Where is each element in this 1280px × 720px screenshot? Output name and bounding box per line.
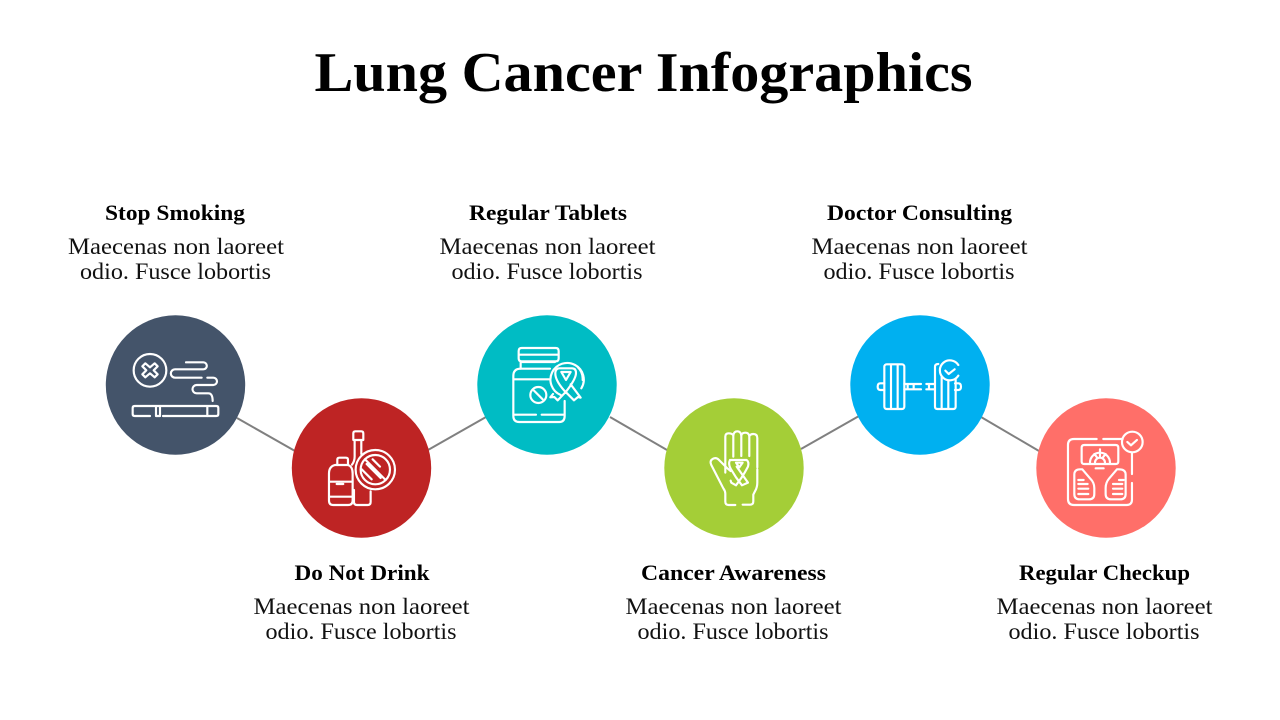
heading: doctor consulting: Doctor Consulting — [827, 200, 1012, 225]
text: cancer awareness description: odio. Fusce lobortis — [638, 619, 829, 644]
circle: doctor consulting — [850, 315, 990, 455]
text: do not drink description: Maecenas non laoreet — [254, 594, 470, 619]
text: stop smoking description: Maecenas non laoreet — [68, 234, 285, 259]
text: regular checkup description — [996, 594, 1213, 644]
step: doctor consulting — [812, 200, 1028, 455]
text: regular tablets description: Maecenas non laoreet — [440, 234, 656, 259]
text: do not drink description — [254, 594, 470, 644]
icon: dumbbell with check — [878, 360, 961, 409]
text: doctor consulting description: odio. Fusce lobortis — [824, 259, 1015, 284]
heading: do not drink: Do Not Drink — [294, 560, 430, 585]
circle: do not drink — [292, 398, 431, 538]
text: cancer awareness description — [626, 594, 842, 644]
step: regular tablets — [440, 200, 656, 455]
text: regular tablets description — [440, 234, 656, 284]
circle: stop smoking — [106, 315, 245, 455]
heading: regular checkup: Regular Checkup — [1019, 560, 1190, 585]
text: regular checkup description: odio. Fusce lobortis — [1008, 619, 1200, 644]
step: regular checkup — [996, 398, 1213, 644]
circle: regular tablets — [477, 315, 617, 455]
step: cancer awareness — [626, 398, 842, 644]
icon: pill bottle with ribbon — [513, 348, 584, 422]
text: doctor consulting description — [812, 234, 1028, 284]
text: regular checkup description: Maecenas non laoreet — [996, 594, 1213, 619]
icon: bottles with prohibition — [329, 431, 395, 505]
connector lines — [237, 416, 1039, 451]
text: cancer awareness description: Maecenas non laoreet — [626, 594, 842, 619]
text: stop smoking description — [68, 234, 285, 284]
heading: stop smoking: Stop Smoking — [105, 200, 245, 225]
heading: cancer awareness: Cancer Awareness — [641, 560, 826, 585]
step: do not drink — [254, 398, 470, 644]
circle: cancer awareness — [664, 398, 804, 538]
step: stop smoking — [68, 200, 285, 455]
text: doctor consulting description: Maecenas non laoreet — [812, 234, 1028, 259]
icon: hand with ribbon — [711, 431, 757, 505]
icon: weighing scale with check — [1068, 432, 1143, 505]
text: do not drink description: odio. Fusce lobortis — [266, 619, 457, 644]
text: stop smoking description: odio. Fusce lobortis — [80, 259, 271, 284]
text: regular tablets description: odio. Fusce lobortis — [452, 259, 643, 284]
heading: regular tablets: Regular Tablets — [469, 200, 627, 225]
icon: cigarette — [133, 354, 218, 416]
circle: regular checkup — [1036, 398, 1176, 538]
title: Lung Cancer Infographics — [314, 42, 972, 104]
